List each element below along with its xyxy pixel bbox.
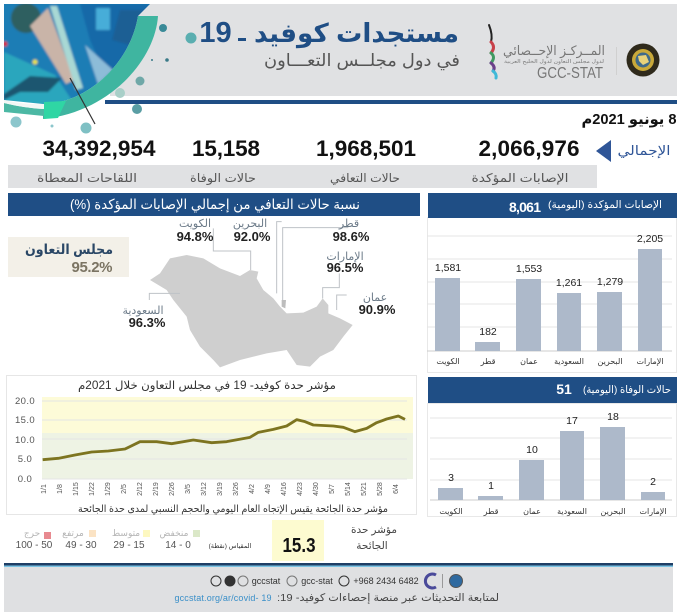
x axis dates: 5/21: [361, 482, 368, 496]
bar: Saudi: السعودية: [554, 357, 584, 366]
severity index value: 15.3: [282, 535, 316, 557]
bar: Bahrain: البحرين: [598, 357, 622, 366]
scale legend: المقياس (نقطة): [209, 543, 252, 550]
legend: critical: 100 - 50: [16, 540, 53, 551]
bar: Emirates: الإمارات: [639, 507, 667, 517]
bar: Emirates: 2: [650, 476, 656, 488]
legend: medium: متوسط: [112, 528, 140, 538]
panel: daily confirmed cases: [427, 193, 677, 372]
x axis dates: 5/7: [329, 484, 336, 494]
legend: critical: [16, 528, 53, 551]
callout: GCC average: 95.2%: [72, 259, 112, 276]
bar: Saudi: [554, 277, 584, 366]
bar: Qatar: قطر: [483, 507, 499, 516]
bar: Oman: [519, 444, 544, 516]
bar: Oman: 10: [526, 444, 538, 456]
bar: Qatar: 182: [479, 326, 497, 338]
label: Qatar: 98.6%: [333, 229, 370, 244]
severity index value: [272, 520, 397, 561]
logo: GCC-STAT: لدول مجلس التعاون لدول الخليج العربية: [504, 59, 605, 65]
label: UAE: [326, 251, 364, 275]
logo: GCC-STAT: GCC-STAT: [537, 65, 603, 82]
legend: low: منخفض: [160, 528, 189, 538]
bar: Emirates: 2,205: [637, 233, 663, 245]
map of GCC: [149, 222, 353, 367]
bar: Emirates: الإمارات: [636, 357, 664, 367]
x axis dates: 3/5: [185, 484, 192, 494]
panel: severity index line chart: 15.0: [15, 415, 35, 426]
x axis dates: 3/19: [217, 482, 224, 496]
header banner: [105, 4, 677, 104]
stat: deaths: 15,158: [192, 136, 260, 161]
subtitle: في دول مجلــس التعـــاون: [264, 51, 460, 71]
severity index value: الجائحة: [356, 540, 388, 552]
bar: Emirates: [636, 233, 664, 367]
x axis dates: [41, 482, 400, 496]
bar: Kuwait: الكويت: [439, 507, 463, 516]
bar: Qatar: [478, 480, 503, 516]
stat: recovered: 1,968,501: [316, 136, 416, 161]
bar: Bahrain: 1,279: [597, 276, 623, 288]
bar: Saudi: 17: [566, 415, 578, 427]
footer: gccstat.org/ar/covid- 19: [174, 593, 272, 603]
bar: Kuwait: 1,581: [435, 262, 461, 274]
icon: ribbon: [489, 25, 496, 78]
bar: Saudi: 1,261: [556, 277, 582, 289]
stat: vaccines: 34,392,954: [42, 136, 156, 161]
panel: severity index line chart: [6, 376, 416, 515]
panel: daily confirmed cases: 8,061: [509, 199, 541, 215]
x axis dates: 1/29: [105, 482, 112, 496]
icon: GCC emblem small: [450, 574, 462, 588]
label: Oman: عمان: [363, 292, 387, 304]
scale legend: [16, 528, 252, 551]
x axis dates: 3/12: [201, 482, 208, 496]
x axis dates: 2/5: [121, 484, 128, 494]
logo: GCC-STAT: المــركـز الإحــصائي: [503, 43, 605, 59]
label: Kuwait: 94.8%: [177, 229, 214, 244]
x axis dates: 1/22: [89, 482, 96, 496]
total statistics: [8, 136, 597, 188]
bar: Oman: [516, 263, 542, 366]
chart title: مؤشر حدة كوفيد- 19 في مجلس التعاون خلال 2021م: [78, 380, 336, 393]
icon: GCC-STAT logo: [425, 574, 436, 588]
x axis dates: 4/23: [297, 482, 304, 496]
bar: Oman: عمان: [520, 357, 538, 366]
panel: daily deaths: حالات الوفاة (اليومية): [583, 384, 671, 396]
droplets: [10, 24, 196, 134]
x axis dates: 2/12: [137, 482, 144, 496]
header image: vaccine circle: [0, 0, 160, 124]
panel: daily deaths: [428, 377, 677, 517]
label: Saudi Arabia: السعودية: [122, 305, 164, 317]
legend: high: [62, 528, 97, 551]
label: Oman: 90.9%: [359, 302, 396, 317]
x axis dates: 5/14: [345, 482, 352, 496]
bar: Saudi: السعودية: [557, 507, 587, 516]
label: Qatar: قطر: [338, 218, 359, 230]
stat: confirmed: [472, 136, 580, 186]
legend: high: 49 - 30: [65, 540, 97, 551]
bar: Bahrain: البحرين: [601, 507, 625, 516]
stat: vaccines: اللقاحات المعطاة: [37, 171, 137, 185]
x axis dates: 6/4: [393, 484, 400, 494]
bar: Bahrain: 18: [607, 411, 619, 423]
footer: gcc-stat: [301, 576, 333, 586]
stat: deaths: حالات الوفاة: [190, 171, 256, 186]
legend: high: مرتفع: [62, 528, 84, 538]
chart note: مؤشر حدة الجائحة يقيس الإتجاه العام اليومي والحجم النسبي لمدى حدة الجائحة: [78, 504, 388, 515]
bar: Qatar: [475, 326, 500, 366]
footer: [4, 563, 673, 612]
footer: gccstat: [252, 576, 281, 586]
date: 8 يونيو 2021م: [582, 111, 676, 128]
panel: severity index line chart: 5.0: [18, 454, 32, 465]
bar: Saudi: [557, 415, 587, 516]
bar: Bahrain: [600, 411, 625, 516]
x axis dates: 1/15: [73, 482, 80, 496]
needle: [70, 78, 95, 124]
label: Bahrain: 92.0%: [234, 229, 271, 244]
title: 19: [199, 17, 232, 49]
x axis dates: 4/16: [281, 482, 288, 496]
label: UAE: 96.5%: [327, 260, 364, 275]
legend: low: [160, 528, 200, 551]
icons: social media: [211, 576, 349, 586]
bar: Emirates: [639, 476, 667, 517]
footer: +968 2434 6482: [353, 576, 419, 586]
x axis dates: 4/30: [313, 482, 320, 496]
label: Saudi Arabia: 96.3%: [129, 315, 166, 330]
title: مستجدات كوفيد: [254, 18, 459, 49]
teal arc: [43, 16, 158, 119]
panel: daily deaths: 51: [556, 381, 572, 397]
bar: Oman: عمان: [523, 507, 541, 516]
label: Bahrain: البحرين: [233, 218, 267, 230]
bar: Oman: 1,553: [516, 263, 542, 275]
panel: severity index line chart: 10.0: [15, 435, 35, 446]
label: Kuwait: [177, 218, 214, 244]
x axis dates: 4/9: [265, 484, 272, 494]
total label and arrow: [596, 140, 670, 162]
stat: confirmed: 2,066,976: [478, 136, 580, 161]
bar: Kuwait: الكويت: [436, 357, 460, 366]
panel: severity index line chart: 0.0: [18, 474, 32, 485]
bar: Qatar: قطر: [480, 357, 496, 366]
label: Saudi Arabia: [122, 305, 166, 330]
severity index value: مؤشر حدة: [351, 524, 397, 536]
label: Kuwait: الكويت: [179, 218, 211, 230]
panel: recovery rate map: [8, 193, 420, 367]
legend: critical: حرج: [24, 528, 40, 538]
x axis dates: 2/19: [153, 482, 160, 496]
bar: Kuwait: [435, 262, 461, 366]
stat: deaths: [190, 136, 260, 186]
logo: GCC-STAT: [489, 25, 660, 82]
x axis dates: 1/8: [57, 484, 64, 494]
legend: medium: [112, 528, 150, 551]
legend: low: 14 - 0: [165, 540, 191, 551]
panel: recovery rate map: نسبة حالات التعافي من إجمالي الإصابات المؤكدة (%): [70, 196, 360, 213]
label: UAE: الإمارات: [326, 251, 364, 263]
label: Bahrain: [233, 218, 271, 244]
stat: recovered: حالات التعافي: [330, 171, 400, 185]
callout: GCC average: مجلس التعاون: [25, 242, 113, 257]
label: Oman: [359, 292, 396, 317]
x axis dates: 2/26: [169, 482, 176, 496]
bar: Kuwait: [438, 472, 463, 516]
x axis dates: 1/1: [41, 484, 48, 494]
bar: Qatar: 1: [488, 480, 494, 492]
callout: GCC average: [8, 237, 129, 277]
stat: confirmed: الإصابات المؤكدة: [472, 171, 568, 186]
panel: daily confirmed cases: الإصابات المؤكدة (اليومية): [548, 199, 662, 211]
stat: recovered: [316, 136, 416, 185]
total label and arrow: الإجمالي: [618, 143, 670, 158]
x axis dates: 4/2: [249, 484, 256, 494]
x axis dates: 3/26: [233, 482, 240, 496]
stat: vaccines: [37, 136, 156, 185]
x axis dates: 5/28: [377, 482, 384, 496]
panel: severity index line chart: 20.0: [15, 396, 35, 407]
icon: GCC emblem: [626, 44, 660, 76]
bar: Kuwait: 3: [448, 472, 454, 484]
bar: Bahrain: [597, 276, 623, 366]
label: Qatar: [333, 218, 370, 244]
legend: medium: 29 - 15: [113, 540, 145, 551]
footer link text: لمتابعة التحديثات عبر منصة إحصاءات كوفيد- 19:: [277, 592, 499, 604]
